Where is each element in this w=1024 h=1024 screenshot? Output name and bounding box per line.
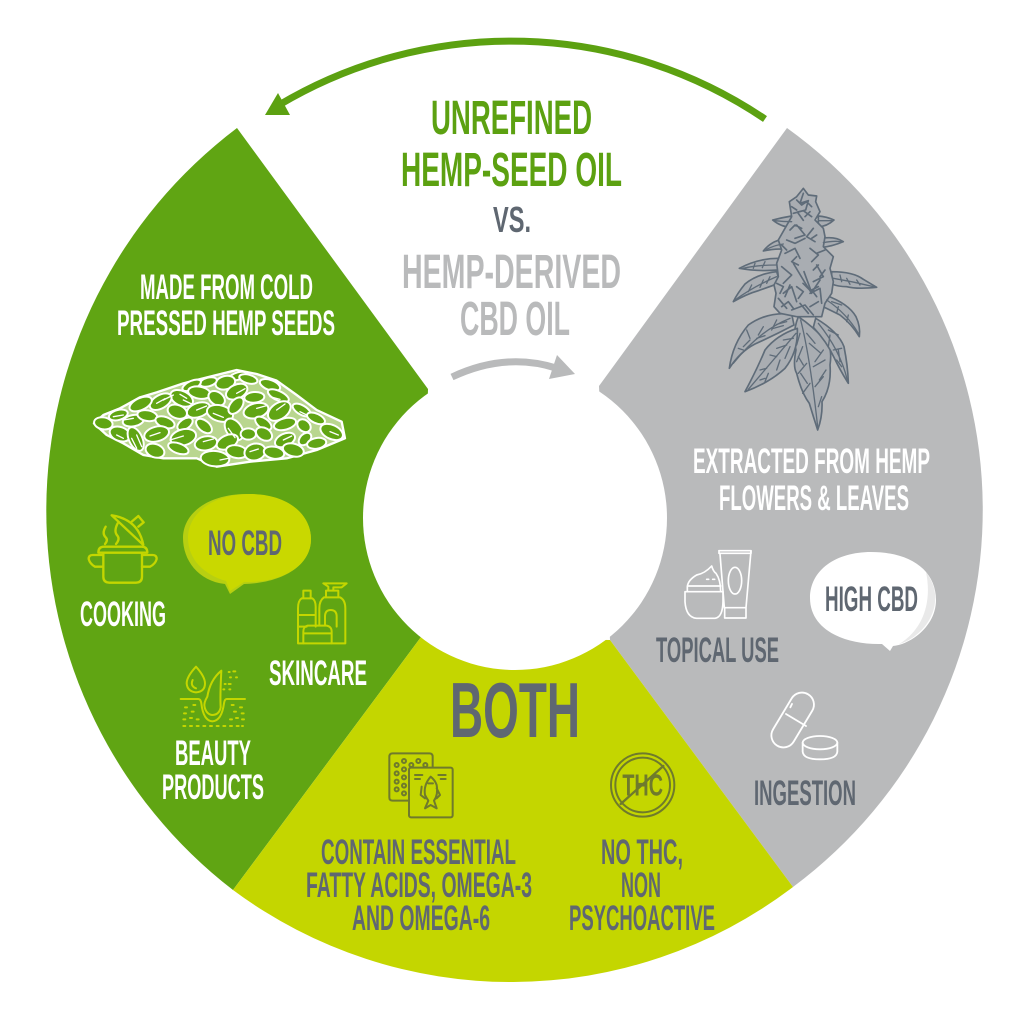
icon: fish oil omega documents [389,753,453,817]
text: no THC non psychoactive: PSYCHOACTIVE [569,899,715,938]
text: extracted from hemp flowers and leaves [693,442,930,518]
arrow: green arc to hemp-seed sector [265,41,765,119]
text: essential fatty acids: CONTAIN ESSENTIAL [321,833,516,872]
callout text: NO CBD [208,524,282,563]
text: beauty products: BEAUTY [175,734,251,773]
text: essential fatty acids: AND OMEGA-6 [352,899,490,938]
text: made from cold pressed hemp seeds [117,268,335,343]
text: no THC non psychoactive [569,833,715,938]
icon: capsule and pill [767,688,837,759]
text: made from cold pressed hemp seeds: PRESSED HEMP SEEDS [117,304,335,343]
plant bud [774,188,833,317]
title line: vs: VS. [493,199,531,240]
icon: skincare bottles [298,583,347,643]
icon: hemp plant [729,188,877,430]
plant detail strokes [777,193,825,315]
icon: beauty products hair follicle [181,667,245,726]
icon: no THC [611,753,674,817]
text: no THC non psychoactive: NO THC, [601,833,683,872]
text: essential fatty acids: FATTY ACIDS, OMEGA-3 [306,866,532,905]
callout: high CBD [810,552,936,651]
heading: both: BOTH [450,666,580,754]
panel: hemp-seed oil sector [46,128,428,890]
text: skincare: SKINCARE [269,654,367,693]
title line: cbd oil: CBD OIL [460,293,570,346]
icon text: THC: THC [622,769,663,803]
centre circle [363,366,667,670]
text: beauty products: PRODUCTS [162,768,264,807]
icon: topical cream and tube [685,551,751,618]
callout text: HIGH CBD [825,580,918,619]
arrow: grey arc to CBD sector [452,355,575,379]
panel: both sector [233,637,793,982]
title line: hemp-seed oil: HEMP-SEED OIL [401,144,622,197]
title [401,92,622,346]
title line: unrefined: UNREFINED [431,92,592,145]
panel: CBD oil sector [599,128,983,887]
text: no THC non psychoactive: NON [621,866,661,905]
callout: no CBD [183,494,311,594]
text: beauty products [162,734,264,807]
text: essential fatty acids [306,833,532,938]
plant leaves [729,216,877,430]
text: made from cold pressed hemp seeds: MADE FROM COLD [140,268,313,307]
text: cooking: COOKING [80,595,166,634]
icon: cooking pot [89,515,157,583]
text: ingestion: INGESTION [754,774,856,813]
icon: hemp seed pile [93,370,345,468]
text: topical use: TOPICAL USE [656,631,779,670]
title line: hemp-derived: HEMP-DERIVED [402,246,621,299]
